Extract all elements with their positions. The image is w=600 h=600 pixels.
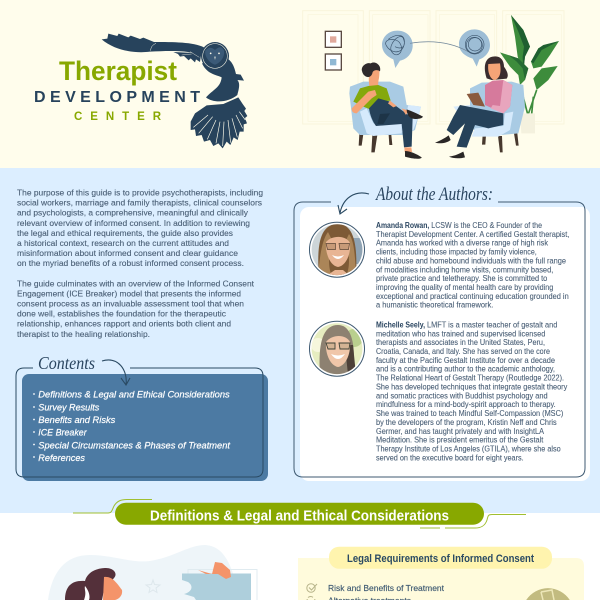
check icons [307,584,317,600]
background blob [48,545,240,600]
text: Michelle Seely bio: She was trained to teach Mindful Self-Compassion (MSC) [376,409,564,418]
text: Amanda Rowan bio [376,221,569,310]
contents list [33,389,230,463]
contents background [22,374,268,481]
text: Amanda Rowan bio: child abuse and homebound individuals with the full range [376,256,567,265]
intro text block: The purpose of this guide is to provide psychotherapists, including [17,188,263,198]
intro text block: therapist to the healing relationship. [17,329,150,339]
contents list: References [38,452,85,463]
intro text block: relevant overview of informed consent. In addition to reviewing [17,218,250,228]
logo wordmark: Therapist [59,56,177,86]
logo: Therapist Development Center [34,34,247,148]
intro text block: a historical context, research on the current attitudes and [17,238,229,248]
text: Michelle Seely bio: therapists and associates in the United States, Peru, [376,338,545,347]
legal list: Risk and Benefits of Treatment [328,583,445,593]
logo wordmark: DEVELOPMENT [34,89,200,106]
plant [500,15,559,133]
icon: flying owl [102,34,247,148]
contents list: Special Circumstances & Phases of Treatment [38,439,230,450]
photo: Michelle Seely [310,321,364,376]
person: therapist [435,56,512,158]
text: Amanda Rowan bio: of modalities including home visits, community based, [376,265,553,274]
text: Amanda Rowan bio: private practice and teletherapy. She is committed to [376,274,548,283]
text: Michelle Seely bio: She has developed techniques that integrate gestalt theory [376,382,567,392]
torn piece [198,562,231,579]
text: Michelle Seely bio: Croatia, Canada, and Italy. She has served on the core [376,347,550,356]
intro text block: and psychologists, a comprehensive, meaningful and clinically [17,208,249,218]
legal list [328,583,445,600]
legal card [298,558,584,600]
text: Michelle Seely bio: Therapy Institute of Los Angeles (GTILA), where she also [376,444,561,454]
text: Amanda Rowan bio: clients, including those impacted by family violence, [376,248,537,257]
text: Michelle Seely bio: The Relational Heart of Gestalt Therapy (Routledge 2022). [376,374,564,383]
text: Michelle Seely bio: faculty at the Pacific Gestalt Institute for over a decade [376,356,556,365]
contents list: Definitions & Legal and Ethical Considerations [38,389,230,400]
arrow: contents [102,360,130,385]
photo: Amanda Rowan [310,222,364,277]
intro text block: the legal and ethical requirements, the guide also provides [17,228,233,238]
text: Amanda Rowan bio: Therapist Development Center. A certified Gestalt therapist, [376,230,569,239]
text: Amanda Rowan bio: LCSW is the CEO & Founder of the [431,221,542,230]
illustration: therapy session [303,11,564,159]
panel: about the authors [294,184,590,481]
wall panels [303,11,564,124]
puzzle board [188,570,257,600]
chair: right [453,82,525,152]
intro text block: Engagement (ICE Breaker) model that presents the informed [17,288,241,298]
panel: legal requirements [298,547,584,600]
panel: contents [16,353,268,481]
text: Amanda Rowan bio: improving the quality of mental health care by providing [376,283,553,292]
intro text block: done well, establishes the foundation for the therapeutic [17,309,227,319]
person: client [352,63,423,159]
banner title: Definitions & Legal and Ethical Considerations [150,508,449,524]
text: Michelle Seely bio: served on the executive board for eight years. [376,453,524,462]
authors card [300,207,590,481]
intro text block: misinformation about informed consent and clear guidance [17,248,238,258]
text: Amanda Rowan bio: exceptional and practical continuing education grounded in [376,292,569,301]
intro text block: consent process as an invaluable assessment tool that when [17,298,244,308]
section banner: definitions [73,500,526,528]
contents list: Survey Results [38,401,100,412]
text: Amanda Rowan bio: Amanda Rowan, [376,221,429,230]
illustration: woman with puzzle [48,545,257,600]
framed pictures [325,31,341,70]
contents list: ICE Breaker [38,427,88,438]
logo wordmark: CENTER [74,111,162,123]
legal heading: Legal Requirements of Informed Consent [347,553,534,565]
text: Amanda Rowan bio: a humanistic theoretical framework. [376,301,493,310]
intro text block: on the myriad benefits of a robust informed consent process. [17,258,244,268]
woman [65,568,122,600]
text: Michelle Seely bio: Michelle Seely, [376,320,425,329]
legal heading pill [329,547,552,569]
text: Amanda Rowan bio: Amanda has worked with a diverse range of high risk [376,239,549,248]
intro text block [17,188,263,339]
text: Michelle Seely bio: Germer, and has taught privately and with InsightLA [376,427,545,436]
intro text block: social workers, marriage and family therapists, clinical counselors [17,198,262,208]
text: Michelle Seely bio: meditation who has trained and supervised licensed [376,329,545,338]
text: Michelle Seely bio: Meditation. She is president emeritus of the Gestalt [376,436,544,445]
text: Michelle Seely bio: mindfulness for a mind-body-spirit approach to therapy. [376,400,556,409]
text: Michelle Seely bio: LMFT is a master teacher of gestalt and [427,320,557,329]
icon: document circle [526,588,570,600]
text: Michelle Seely bio: and is a contributing author to the academic anthology, [376,365,555,374]
contents list: Benefits and Risks [38,414,116,425]
logo wordmark [34,56,200,123]
authors heading: About the Authors: [374,184,493,205]
star outline [146,580,160,592]
intro text block: relationship, enhances rapport and orients both client and [17,319,231,329]
arrow: authors [338,193,369,214]
text: Michelle Seely bio [376,320,567,462]
chair: left [349,82,421,152]
thought bubbles [382,29,490,68]
contents heading: Contents [38,353,95,373]
text: Michelle Seely bio: and somatic practices with Buddhist psychology and [376,391,548,400]
text: Michelle Seely bio: by the developers of the program, Kristin Neff and Chris [376,418,557,427]
intro text block: The guide culminates with an overview of the Informed Consent [17,278,255,288]
